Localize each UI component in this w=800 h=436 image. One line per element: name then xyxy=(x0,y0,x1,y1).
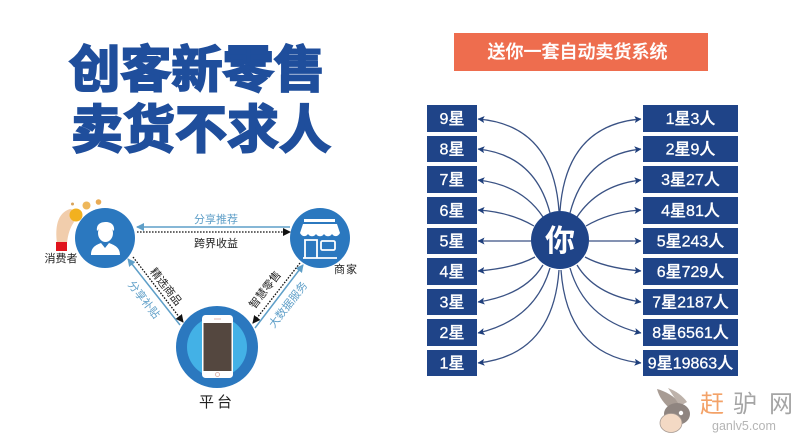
arrow: smart retail xyxy=(253,263,300,323)
text: site url: ganlv5.com xyxy=(712,419,776,433)
label: consumer: 消费者 xyxy=(44,251,78,265)
right star and people boxes: 2星9人 xyxy=(666,140,715,158)
left star boxes: 1星 xyxy=(440,354,464,372)
title: 卖货不求人 xyxy=(71,102,331,160)
label: smart retail: 智慧零售 xyxy=(246,268,284,311)
label: selected goods: 精选商品 xyxy=(147,265,185,308)
right star and people boxes: 8星6561人 xyxy=(652,324,729,342)
banner: 送你一套自动卖货系统 xyxy=(488,42,668,62)
left star boxes: 3星 xyxy=(440,294,464,312)
label: share recommendation: 分享推荐 xyxy=(194,212,238,226)
title xyxy=(69,42,331,160)
left star boxes: 7星 xyxy=(440,171,464,189)
arrow: share subsidy xyxy=(128,259,180,325)
icon: merchant circle xyxy=(290,208,350,268)
title: 创客新零售 xyxy=(69,42,325,98)
panel: business triangle diagram xyxy=(44,199,358,411)
left star boxes: 5星 xyxy=(440,232,464,250)
right star and people boxes: 5星243人 xyxy=(657,232,724,250)
right star and people boxes: 4星81人 xyxy=(661,202,720,220)
left star boxes: 8星 xyxy=(440,140,464,158)
icon: donkey head xyxy=(657,388,690,432)
icon: platform circle with phone xyxy=(176,306,258,388)
left star boxes: 2星 xyxy=(440,324,464,342)
label: platform: 平台 xyxy=(199,394,235,411)
center circle: you xyxy=(531,211,589,269)
left star boxes: 6星 xyxy=(440,202,464,220)
label: big data service: 大数据服务 xyxy=(265,279,310,331)
left star boxes xyxy=(427,105,477,376)
label: merchant: 商家 xyxy=(334,262,358,276)
icon: consumer circle xyxy=(75,208,135,268)
right star and people boxes xyxy=(643,105,738,376)
right star and people boxes: 6星729人 xyxy=(657,263,724,281)
banner xyxy=(454,33,708,71)
panel: referral arrows xyxy=(478,119,641,363)
arrow: cross-border revenue xyxy=(137,231,290,233)
right star and people boxes: 1星3人 xyxy=(666,110,715,128)
right star and people boxes: 3星27人 xyxy=(661,171,720,189)
arrow: big data service xyxy=(255,265,303,328)
left star boxes: 9星 xyxy=(440,110,464,128)
label: share subsidy: 分享补贴 xyxy=(125,278,163,321)
right star and people boxes: 7星2187人 xyxy=(652,294,729,312)
left star boxes: 4星 xyxy=(440,263,464,281)
text: site name: 赶 xyxy=(700,391,724,418)
right star and people boxes: 9星19863人 xyxy=(648,354,733,372)
arrow: selected goods xyxy=(133,257,183,322)
watermark logo xyxy=(657,388,800,433)
center circle: you: 你 xyxy=(545,225,575,258)
arrow: share recommendation xyxy=(137,226,290,228)
label: cross-border revenue: 跨界收益 xyxy=(194,236,238,250)
icon: hand with coins xyxy=(56,199,101,251)
